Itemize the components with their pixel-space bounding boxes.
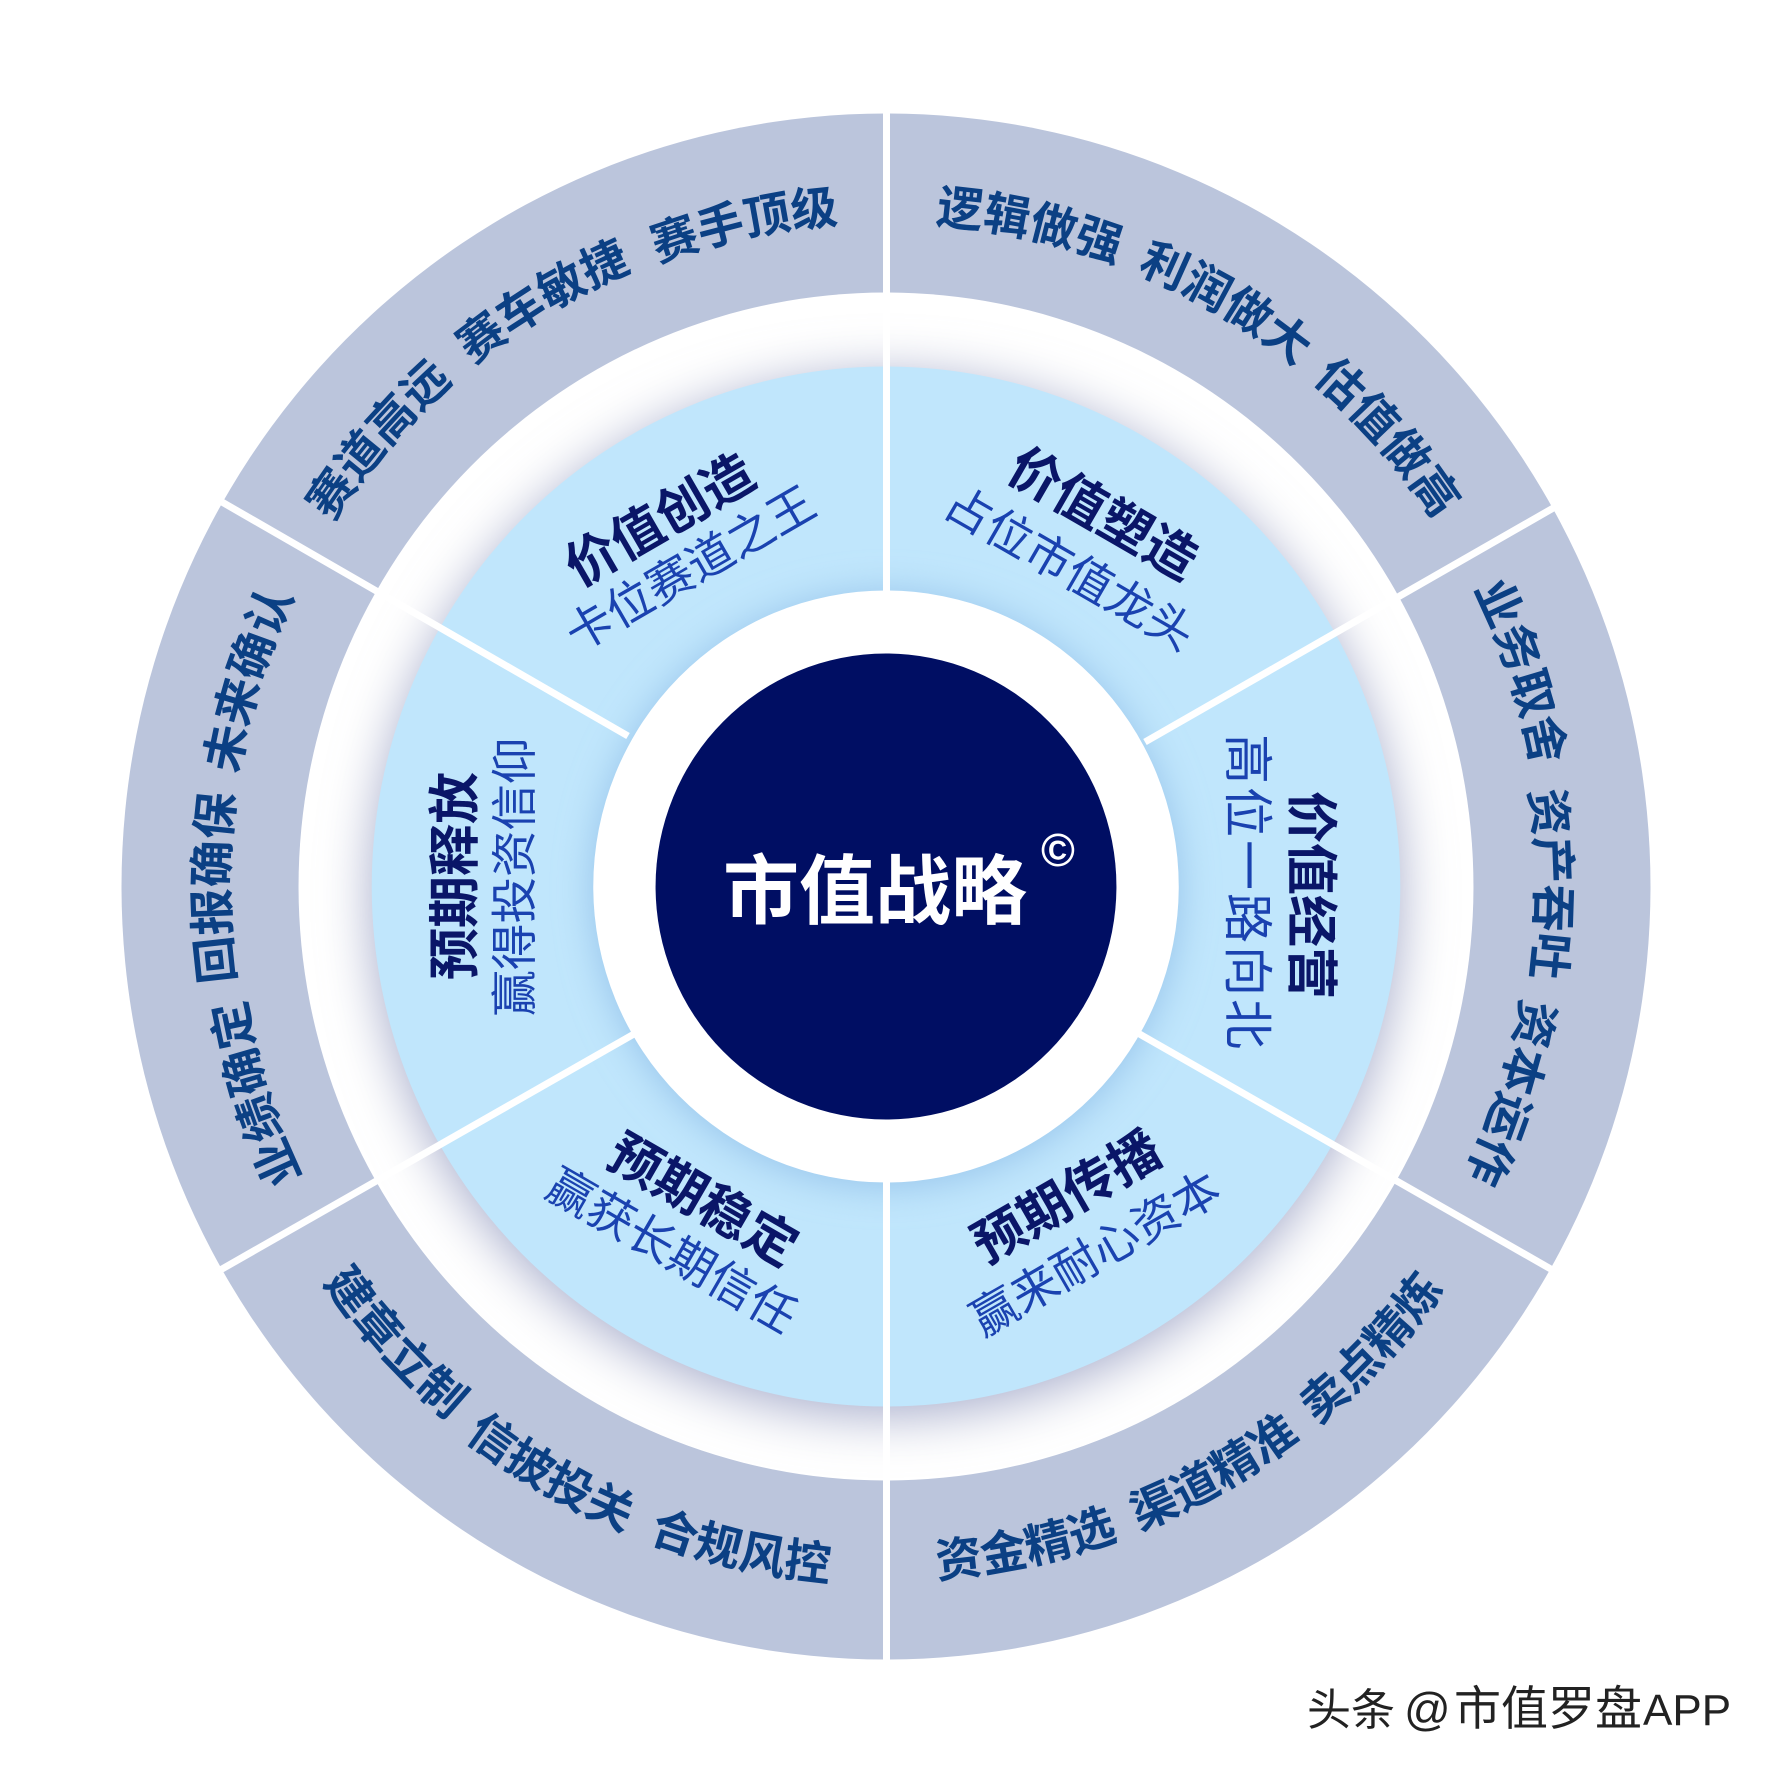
segment: value operation xyxy=(1219,734,1339,1052)
outer text: bottom right segment: 渠道精准 xyxy=(1129,1414,1300,1532)
outer text: top right segment: 利润做大 xyxy=(1140,240,1310,366)
segment: expectation release: 赢得投资信仰 xyxy=(489,738,541,1016)
outer text: bottom left segment: 合规风控 xyxy=(654,1510,831,1584)
centre title: 市值战略 xyxy=(723,850,1027,935)
concentric wheel background xyxy=(122,114,1650,1660)
inner white ring xyxy=(593,590,1179,1182)
watermark: 市值罗盘 xyxy=(1454,1682,1642,1735)
watermark: APP xyxy=(1643,1686,1731,1735)
outer text: right segment: 资产吞吐 xyxy=(1526,790,1576,978)
segment separators xyxy=(215,105,1562,1668)
segment: expectation release xyxy=(427,738,541,1016)
segment: value shaping: 占位市值龙头 xyxy=(936,477,1203,661)
outer text: left segment: 业绩确定 xyxy=(210,1001,303,1186)
outer text: bottom left segment: 信披投关 xyxy=(468,1412,633,1534)
outer text: right segment: 资本运作 xyxy=(1468,999,1559,1188)
outer text: left segment: 回报确保 xyxy=(189,794,238,982)
outer text: top right segment xyxy=(936,184,1526,574)
segment: expectation stability: 赢获长期信任 xyxy=(538,1159,805,1343)
light blue ring xyxy=(372,366,1400,1406)
outer text: top left segment: 赛手顶级 xyxy=(649,186,838,265)
watermark: @ xyxy=(1404,1683,1451,1735)
segment: value operation: 高位一路向北 xyxy=(1219,734,1275,1052)
outer text: left segment: 未来确认 xyxy=(202,592,296,773)
outer text: right segment: 业务取舍 xyxy=(1474,579,1568,760)
outer text: bottom right segment: 卖点精炼 xyxy=(1299,1270,1444,1426)
outer text: right segment xyxy=(1468,579,1576,1188)
outer ring xyxy=(122,114,1650,1660)
segment: expectation release: 预期释放 xyxy=(427,772,485,980)
segment: value creation: 卡位赛道之王 xyxy=(557,477,824,661)
white ring xyxy=(299,292,1473,1480)
white ring soft shadow xyxy=(372,376,1400,1416)
watermark: 头条 xyxy=(1307,1686,1395,1735)
outer text: bottom left segment: 建章立制 xyxy=(322,1262,472,1420)
outer text: top right segment: 估值做高 xyxy=(1314,358,1462,518)
outer text: top left segment: 赛道高远 xyxy=(303,358,454,522)
outer text: top left segment: 赛车敏捷 xyxy=(453,237,632,366)
outer text: top left segment xyxy=(257,186,838,522)
segment: value operation: 价值经营 xyxy=(1281,791,1339,999)
segment: expectation spreading: 赢来耐心资本 xyxy=(962,1162,1229,1346)
segment: expectation spreading: 预期传播 xyxy=(963,1121,1172,1275)
copyright mark: © xyxy=(1041,824,1075,876)
segment: expectation stability: 预期稳定 xyxy=(598,1124,807,1278)
outer text: bottom right segment xyxy=(936,1234,1484,1582)
segment: value shaping: 价值塑造 xyxy=(998,438,1207,592)
segment: value creation: 价值创造 xyxy=(556,444,765,598)
centre navy disc xyxy=(656,654,1116,1120)
light blue ring inner shadow xyxy=(591,592,1181,1188)
outer text: bottom left segment xyxy=(322,1262,831,1584)
outer text: left segment xyxy=(189,592,303,1186)
outer text: top right segment: 逻辑做强 xyxy=(936,184,1124,266)
outer text: bottom right segment: 资金精选 xyxy=(936,1505,1118,1582)
